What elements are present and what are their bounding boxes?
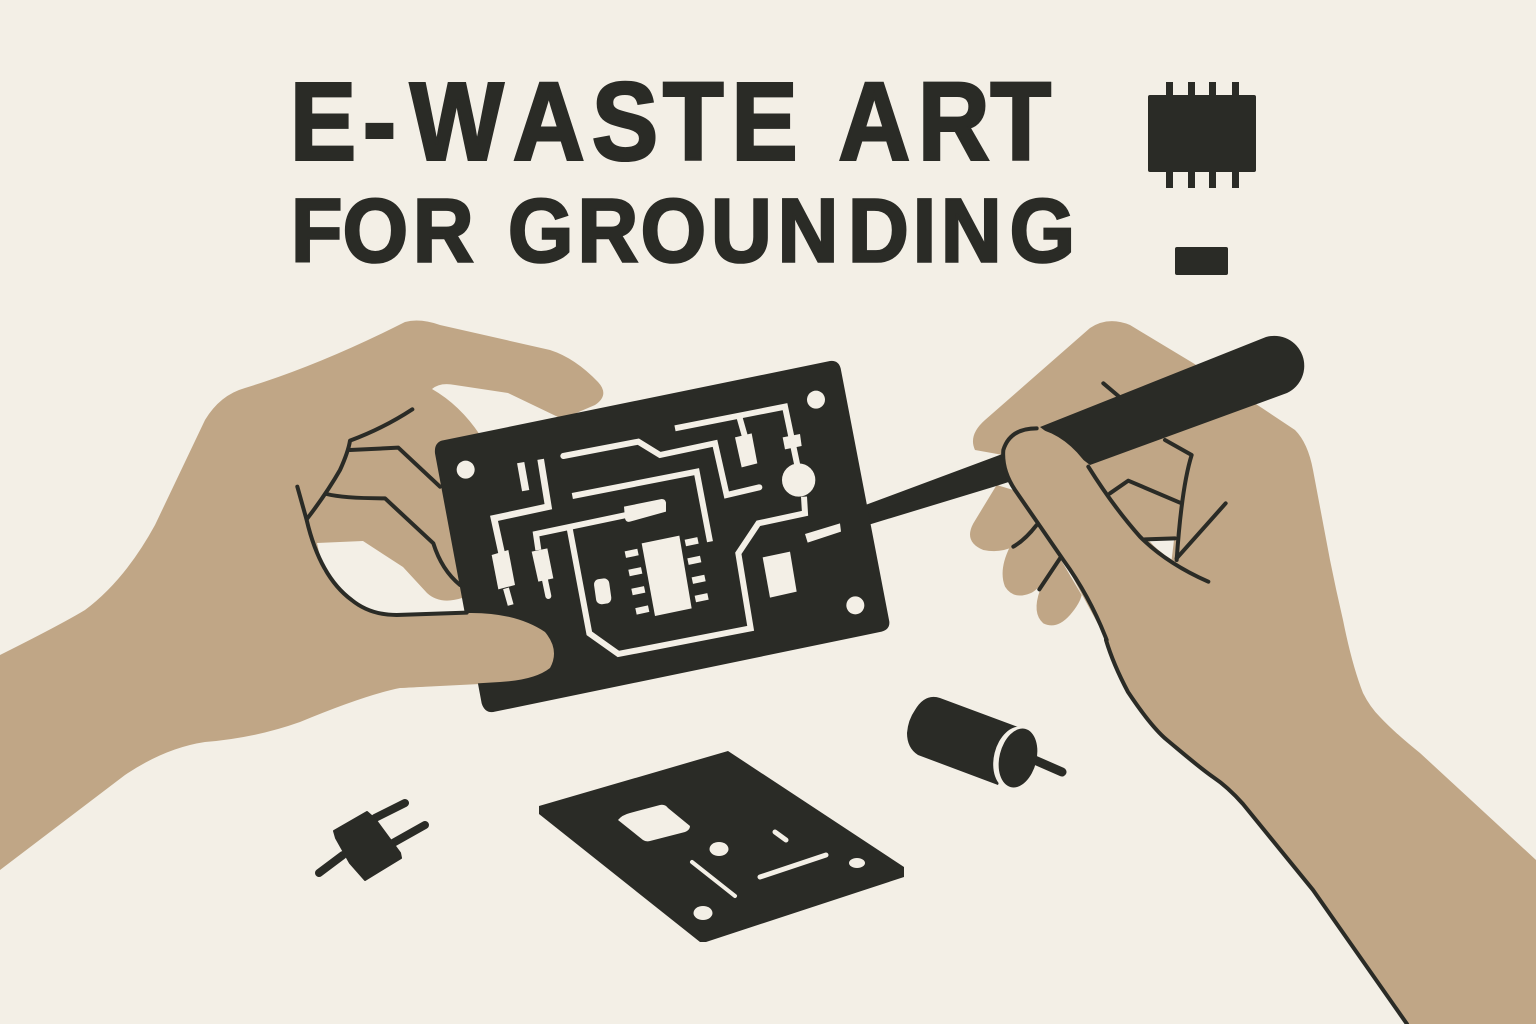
circuit board held in hand (435, 361, 889, 712)
capacitor end ring (987, 722, 1043, 794)
gap between fingers upper (432, 384, 558, 435)
title line 1: E-WASTE ART (290, 61, 1051, 184)
right hand with pen (860, 321, 1536, 1024)
mounting holes (457, 391, 864, 614)
capacitor body (907, 697, 1018, 785)
gap between fingers lower (317, 541, 470, 615)
plug prongs (319, 803, 425, 873)
capacitor end cap (993, 724, 1043, 792)
left hand (0, 321, 603, 870)
board components (492, 433, 841, 616)
plug body (334, 812, 401, 880)
icon: microchip (1148, 82, 1256, 188)
left thumb (400, 613, 554, 688)
loose board body (539, 751, 904, 942)
gap between thumb and palm (1148, 540, 1174, 559)
board body (435, 361, 889, 712)
left hand contour lines (297, 409, 467, 615)
icon: small chip (1175, 247, 1228, 275)
right hand contour lines (1003, 383, 1226, 640)
loose board cutouts (618, 805, 865, 920)
icon: plug component (319, 803, 425, 880)
right hand curled fingers (970, 485, 1082, 625)
title (290, 61, 1075, 281)
right thumb (1003, 428, 1260, 640)
left hand and arm (0, 321, 603, 870)
icon: capacitor (907, 697, 1062, 794)
title line 2: FOR GROUNDING (291, 181, 1075, 281)
engraving pen (860, 336, 1304, 525)
board traces (494, 407, 805, 654)
loose circuit board (539, 751, 904, 942)
IC pins (625, 540, 708, 611)
capacitor lead (1030, 758, 1062, 772)
right hand back and palm (973, 321, 1536, 1024)
right palm edge line (1106, 640, 1407, 1024)
